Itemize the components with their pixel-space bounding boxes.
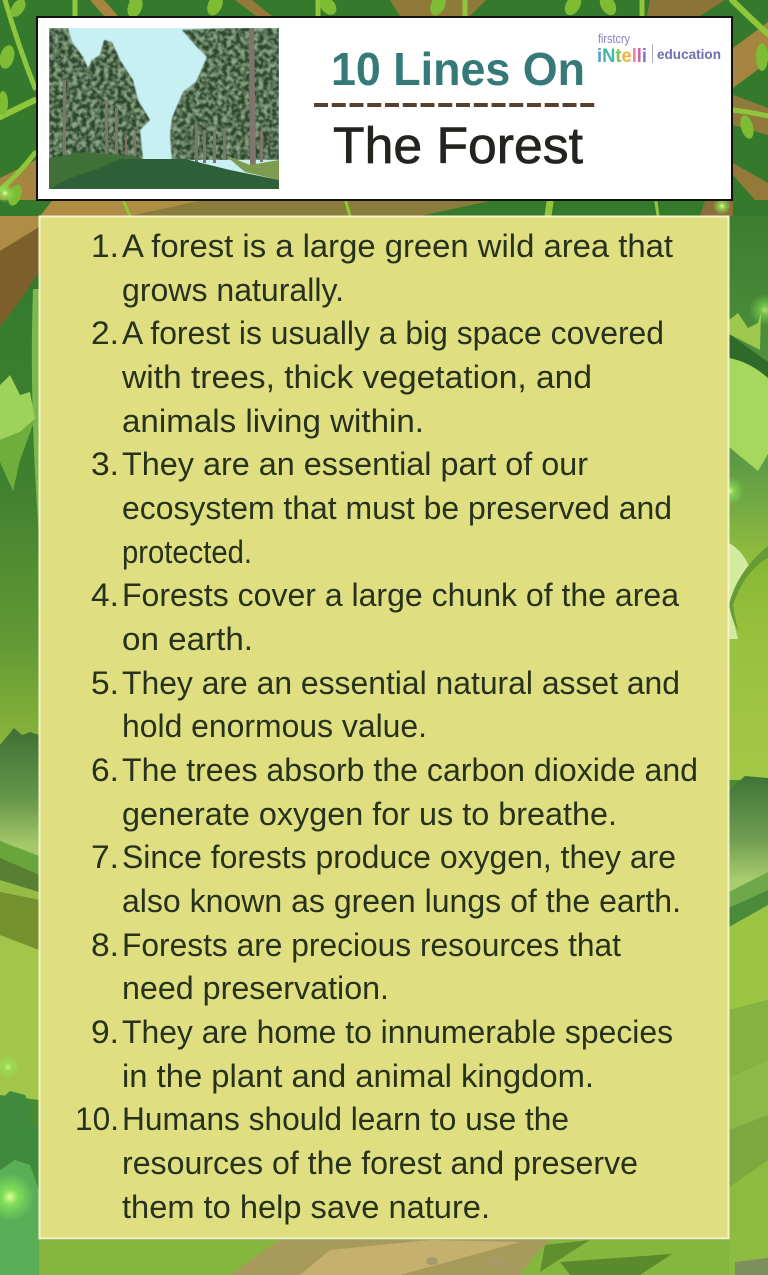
item 5: They are an essential natural asset and xyxy=(122,665,680,701)
item 10: resources of the forest and preserve xyxy=(122,1145,638,1181)
item 1 xyxy=(91,228,673,308)
right hills xyxy=(729,776,768,892)
item 1: 1. xyxy=(91,228,119,264)
item 9: 9. xyxy=(91,1014,119,1050)
item 4 xyxy=(91,577,679,657)
right large leaves xyxy=(729,313,761,350)
logo: iNtelli xyxy=(597,46,647,67)
item 7: Since forests produce oxygen, they are xyxy=(122,839,676,875)
left hills xyxy=(0,728,39,860)
item 8: need preservation. xyxy=(122,970,389,1006)
item 4: Forests cover a large chunk of the area xyxy=(122,577,679,613)
item 5 xyxy=(91,665,680,744)
item 6: 6. xyxy=(91,752,119,788)
item 8: Forests are precious resources that xyxy=(122,927,621,963)
header panel xyxy=(37,17,732,200)
item 5: 5. xyxy=(91,665,119,701)
item 3: They are an essential part of our xyxy=(122,446,588,482)
item 7: also known as green lungs of the earth. xyxy=(122,883,681,919)
item 6: The trees absorb the carbon dioxide and xyxy=(122,752,698,788)
item 1: A forest is a large green wild area that xyxy=(122,228,673,264)
forest photo xyxy=(49,28,279,189)
light glows xyxy=(0,1055,20,1079)
item 2: with trees, thick vegetation, and xyxy=(121,359,592,395)
branches top xyxy=(0,0,768,327)
logo xyxy=(597,31,721,67)
item 9: They are home to innumerable species xyxy=(122,1014,673,1050)
dashed divider xyxy=(314,103,598,107)
heading: 10 Lines On: 10 Lines On xyxy=(331,43,585,95)
item 10: them to help save nature. xyxy=(122,1189,490,1225)
left large leaf xyxy=(0,375,35,440)
heading: The Forest: The Forest xyxy=(333,117,583,174)
item 6 xyxy=(91,752,698,832)
item 10: Humans should learn to use the xyxy=(122,1101,569,1137)
item 3 xyxy=(91,446,672,570)
item 4: 4. xyxy=(91,577,119,613)
bottom ground xyxy=(39,1240,729,1275)
item 9 xyxy=(91,1014,673,1094)
item 10 xyxy=(75,1101,638,1225)
left bushes xyxy=(0,1091,39,1275)
item 9: in the plant and animal kingdom. xyxy=(122,1058,594,1094)
item 2: 2. xyxy=(91,315,119,351)
item 10: 10. xyxy=(75,1101,119,1137)
item 2 xyxy=(91,315,664,439)
left vine by panel xyxy=(32,289,39,536)
item 8: 8. xyxy=(91,927,119,963)
logo: firstcry xyxy=(598,31,630,46)
vines and leaves xyxy=(0,0,768,216)
item 3: 3. xyxy=(91,446,119,482)
item 2: animals living within. xyxy=(122,403,424,439)
item 1: grows naturally. xyxy=(122,272,344,308)
item 2: A forest is usually a big space covered xyxy=(122,315,664,351)
item 3: protected. xyxy=(122,534,252,570)
logo: education xyxy=(657,47,721,62)
item 8 xyxy=(91,927,621,1006)
item 6: generate oxygen for us to breathe. xyxy=(122,796,617,832)
item 5: hold enormous value. xyxy=(122,708,427,744)
item 4: on earth. xyxy=(122,621,253,657)
item 7 xyxy=(91,839,681,919)
item 3: ecosystem that must be preserved and xyxy=(122,490,672,526)
panel: ten lines xyxy=(40,216,728,1238)
item 7: 7. xyxy=(91,839,119,875)
